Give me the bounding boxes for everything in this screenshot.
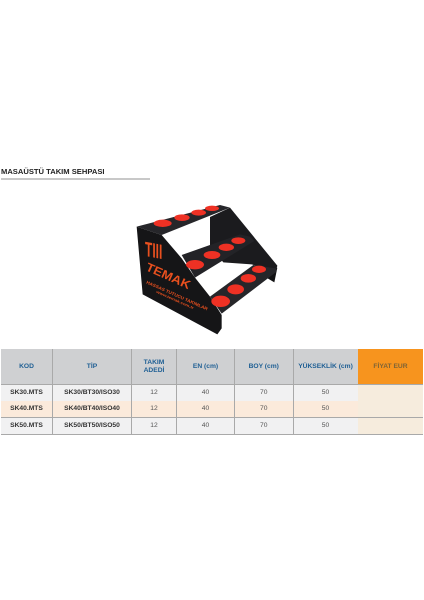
spec table xyxy=(1,349,423,434)
header row: TİP xyxy=(87,363,97,370)
row SK30: 12 xyxy=(150,389,158,396)
row SK50: SK50.MTS xyxy=(10,422,43,429)
header row: ADEDİ xyxy=(144,367,164,374)
header row: TAKIM xyxy=(144,358,164,366)
row SK30 xyxy=(1,385,423,401)
header row: KOD xyxy=(19,363,34,370)
logo text: HASSAS TUTUCU TAKIMLAR xyxy=(146,280,209,312)
logo text: TIII xyxy=(145,238,162,264)
title: MASAÜSTÜ TAKIM SEHPASI xyxy=(1,166,105,176)
logo text: www.temak.com.tr xyxy=(154,289,195,310)
header row: EN (cm) xyxy=(193,363,218,370)
row SK30: SK30.MTS xyxy=(10,389,43,396)
row SK40: 70 xyxy=(260,405,267,412)
header row: BOY (cm) xyxy=(249,363,279,370)
row SK30: SK30/BT30/ISO30 xyxy=(64,389,120,396)
row SK40: 12 xyxy=(150,405,158,412)
row SK30: 40 xyxy=(202,389,209,396)
row SK30: 50 xyxy=(322,389,329,396)
row SK40: SK40.MTS xyxy=(10,405,43,412)
row SK50: 40 xyxy=(202,422,209,429)
icon: red tool holders xyxy=(154,206,266,307)
row SK30: 70 xyxy=(260,389,267,396)
header row: YÜKSEKLİK (cm) xyxy=(298,363,353,370)
logo text xyxy=(144,238,209,312)
row SK40: 50 xyxy=(322,405,329,412)
logo text: TEMAK xyxy=(144,260,193,292)
row SK40 xyxy=(1,401,423,417)
row SK50 xyxy=(1,418,423,434)
row SK40: SK40/BT40/ISO40 xyxy=(64,405,120,412)
row SK50: 12 xyxy=(150,422,158,429)
header row xyxy=(1,349,423,384)
header row: FİYAT EUR xyxy=(373,363,408,370)
row SK50: 70 xyxy=(260,422,267,429)
row SK50: SK50/BT50/ISO50 xyxy=(64,422,120,429)
row SK50: 50 xyxy=(322,422,329,429)
row SK40: 40 xyxy=(202,405,209,412)
product photo: tool stand xyxy=(136,205,278,334)
